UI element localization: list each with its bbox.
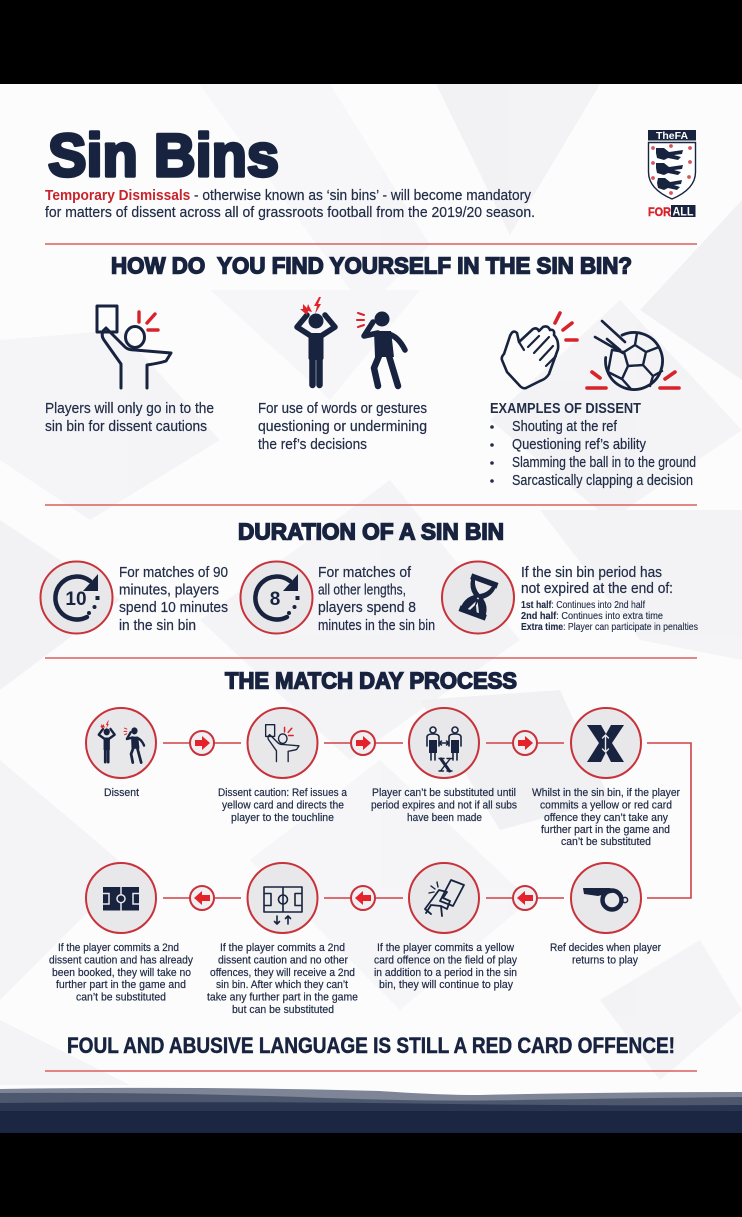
- step 7: second sin bin: dissent caution and no other: [218, 954, 348, 966]
- text: dissent cautions: Players will only go in to the: [45, 401, 214, 417]
- step 7: second sin bin: If the player commits a 2nd: [220, 942, 345, 954]
- icon: referee showing card: [97, 306, 171, 388]
- step 7: second sin bin: but can be substituted: [232, 1004, 334, 1016]
- arrow 2: [351, 731, 375, 755]
- step 7: second sin bin: sin bin. After which they can’t: [216, 979, 348, 991]
- step 4: offence in sin bin: [532, 708, 680, 848]
- step 3: no substitution: have been made: [407, 812, 482, 824]
- step 4: offence in sin bin: offence they can’t take any: [544, 812, 668, 824]
- step 8: no further part: can’t be substituted: [76, 992, 166, 1004]
- title: Sin Bins: [48, 122, 279, 189]
- bottom navy band: [0, 1088, 742, 1133]
- text: dissent cautions: [45, 401, 214, 435]
- step 2: dissent caution: Dissent caution: Ref issues a: [218, 787, 348, 799]
- step 8: no further part: further part in the game and: [56, 979, 186, 991]
- step 7: second sin bin: take any further part in the game: [207, 992, 358, 1004]
- logo: The FA crest: ALL: [672, 206, 694, 218]
- text: 90 minute matches: [119, 565, 228, 634]
- step 1: dissent: Dissent: [104, 787, 139, 799]
- step 5: ref decides: returns to play: [572, 954, 638, 966]
- text: period not expired: [521, 565, 698, 633]
- step 6: yellow card offence: card offence on the field of play: [374, 954, 517, 966]
- heading: how do you find yourself: HOW DO YOU FIND YOURSELF IN THE SIN BIN?: [111, 252, 632, 278]
- icon: slammed ball: [587, 321, 679, 399]
- text: period not expired: not expired at the end of:: [521, 581, 673, 597]
- step 4: offence in sin bin: Whilst in the sin bin, if the player: [532, 787, 680, 799]
- step 5: ref decides: Ref decides when player: [550, 942, 661, 954]
- step 7: second sin bin: [207, 863, 358, 1016]
- heading: duration: DURATION OF A SIN BIN: [238, 518, 504, 544]
- text: 90 minute matches: spend 10 minutes: [119, 600, 228, 616]
- intro text: Temporary Dismissals - otherwise known as ‘sin bins’ - will become mandatory: [45, 188, 532, 204]
- top black band: [0, 0, 742, 84]
- intro text: for matters of dissent across all of grassroots football from the 2019/20 season.: [45, 205, 535, 221]
- text: dissent cautions: sin bin for dissent cautions: [45, 419, 207, 435]
- step 8: no further part: been booked, they will take no: [52, 967, 191, 979]
- logo: The FA crest: TheFA: [656, 130, 688, 142]
- text: period not expired: 2nd half: Continues into extra time: [521, 611, 663, 622]
- text: other lengths: players spend 8: [318, 600, 416, 616]
- icon: dissenting players: [297, 297, 405, 386]
- list: examples of dissent: Slamming the ball in to the ground: [512, 455, 696, 471]
- text: words or gestures: For use of words or gestures: [258, 401, 427, 417]
- logo: The FA crest: FOR: [648, 205, 671, 219]
- text: other lengths: [318, 565, 435, 634]
- step 4: offence in sin bin: further part in the game and: [541, 824, 670, 836]
- step 5: ref decides: [550, 863, 661, 966]
- arrow 5: [351, 886, 375, 910]
- icon: 8 minute clock: 8: [270, 589, 280, 610]
- text: 90 minute matches: For matches of 90: [119, 565, 228, 581]
- step 1: dissent: [86, 708, 156, 799]
- step 4: offence in sin bin: can’t be substituted: [561, 836, 651, 848]
- text: 90 minute matches: in the sin bin: [119, 618, 196, 634]
- arrow 1: [190, 731, 214, 755]
- text: words or gestures: [258, 401, 427, 453]
- step 3: no substitution: period expires and not if all subs: [371, 800, 517, 812]
- icon: 10 minute clock: 10: [65, 589, 87, 610]
- bottom black band: [0, 1133, 742, 1217]
- list: examples of dissent: [490, 401, 696, 489]
- step 4: offence in sin bin: commits a yellow or red card: [540, 800, 672, 812]
- list: examples of dissent: EXAMPLES OF DISSENT: [490, 401, 641, 417]
- step 7: second sin bin: offences, they will receive a 2nd: [210, 967, 355, 979]
- icon: clapping hands: [502, 313, 577, 388]
- heading: match day process: THE MATCH DAY PROCESS: [225, 668, 517, 694]
- icon: 8 minute clock: [240, 562, 312, 634]
- step 6: yellow card offence: bin, they will continue to play: [379, 979, 513, 991]
- step 2: dissent caution: player to the touchline: [231, 812, 334, 824]
- step 8: no further part: dissent caution and has already: [49, 954, 193, 966]
- text: other lengths: minutes in the sin bin: [318, 618, 435, 634]
- list: examples of dissent: Sarcastically clapping a decision: [512, 473, 693, 489]
- text: 90 minute matches: minutes, players: [119, 582, 219, 598]
- arrow 4: [513, 886, 537, 910]
- step 8: no further part: [49, 863, 193, 1004]
- intro text: [45, 188, 535, 221]
- text: words or gestures: the ref’s decisions: [258, 437, 367, 453]
- text: period not expired: Extra time: Player can participate in penalties: [521, 622, 698, 633]
- step 6: yellow card offence: [374, 863, 517, 991]
- step 3: no substitution: Player can’t be substituted until: [372, 787, 516, 799]
- icon: hourglass: [442, 562, 514, 634]
- step 2: dissent caution: yellow card and directs the: [222, 800, 344, 812]
- text: other lengths: all other lengths,: [318, 582, 406, 598]
- text: period not expired: 1st half: Continues into 2nd half: [521, 600, 645, 611]
- connector lines: [163, 743, 691, 898]
- step 6: yellow card offence: in addition to a period in the sin: [374, 967, 517, 979]
- step 6: yellow card offence: If the player commits a yellow: [377, 942, 514, 954]
- list: examples of dissent: Shouting at the ref: [512, 419, 618, 435]
- step 2: dissent caution: [218, 708, 348, 824]
- arrow 3: [513, 731, 537, 755]
- step 3: no substitution: [371, 708, 517, 824]
- text: period not expired: If the sin bin period has: [521, 565, 662, 581]
- step 8: no further part: If the player commits a 2nd: [58, 942, 179, 954]
- icon: 10 minute clock: [40, 562, 112, 634]
- text: words or gestures: questioning or undermining: [258, 419, 427, 435]
- text: other lengths: For matches of: [318, 565, 412, 581]
- list: examples of dissent: Questioning ref’s ability: [512, 437, 647, 453]
- arrow 6: [190, 886, 214, 910]
- logo: The FA crest: [648, 130, 696, 219]
